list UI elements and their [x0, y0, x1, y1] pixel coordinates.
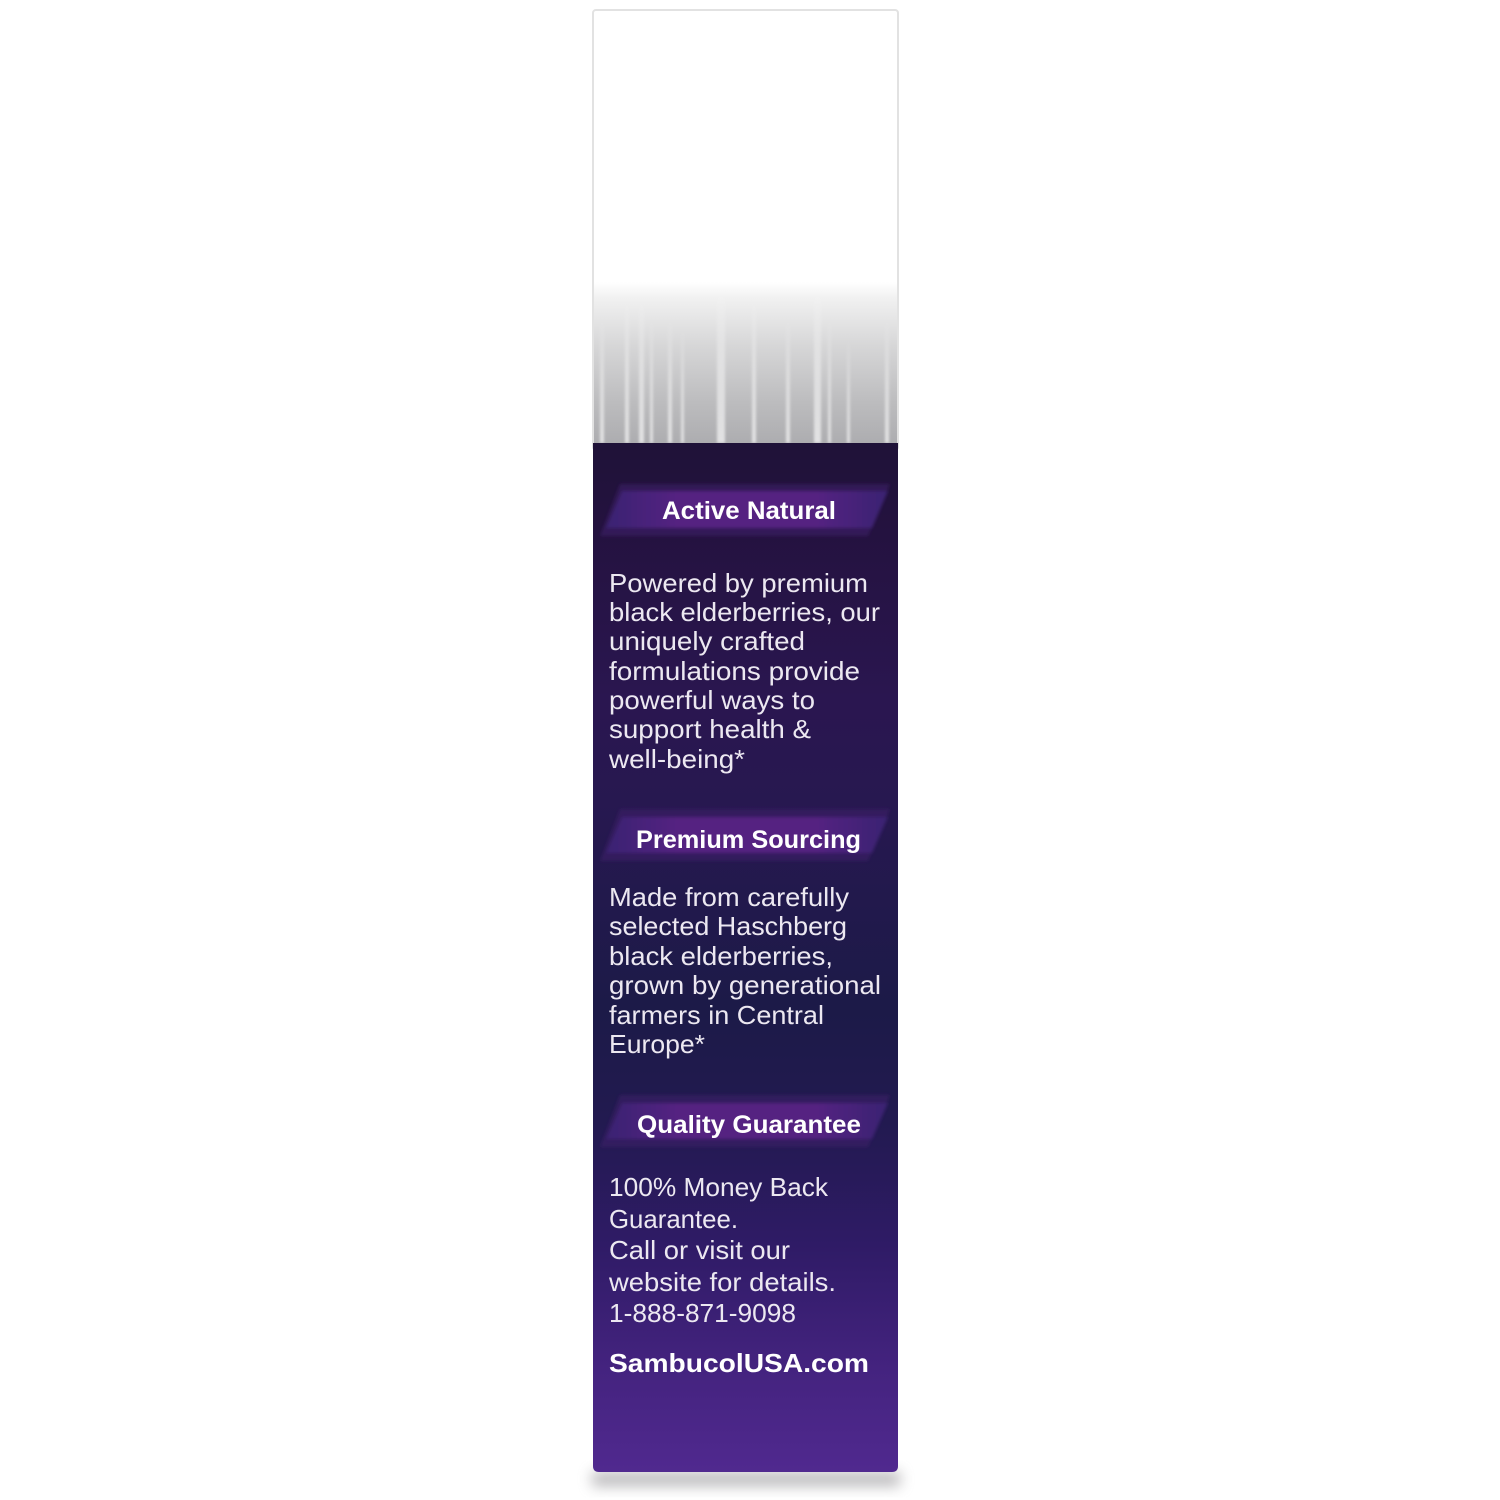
body text: selected Haschberg: [609, 911, 847, 941]
section: Active Natural: [600, 484, 890, 774]
body text: powerful ways to: [609, 685, 815, 715]
purple lower section of box: [593, 443, 898, 1472]
heading ribbon: [600, 809, 890, 861]
body text: grown by generational: [609, 970, 881, 1000]
body text: uniquely crafted: [609, 626, 805, 656]
white top section of box: [593, 10, 898, 450]
heading ribbon: [600, 1095, 890, 1147]
body text: [609, 882, 881, 1059]
body text: 1-888-871-9098: [609, 1298, 796, 1328]
body text: farmers in Central: [609, 1000, 824, 1030]
body text: black elderberries,: [609, 941, 833, 971]
body text: black elderberries, our: [609, 597, 880, 627]
box drop shadow: [592, 1472, 900, 1486]
body text: website for details.: [608, 1267, 836, 1297]
body text: [608, 568, 880, 774]
body text: Call or visit our: [609, 1235, 790, 1265]
body text: well-being*: [608, 744, 745, 774]
body text: Made from carefully: [609, 882, 849, 912]
section: Quality Guarantee: [600, 1095, 890, 1378]
heading: Premium Sourcing: [636, 826, 861, 854]
body text: formulations provide: [609, 656, 860, 686]
silver fade band: [594, 282, 897, 443]
section: Premium Sourcing: [600, 809, 890, 1059]
body text: support health &: [609, 714, 811, 744]
product box side panel: [593, 10, 898, 1472]
website address: SambucolUSA.com: [609, 1348, 869, 1378]
heading ribbon: [600, 484, 890, 536]
heading: Quality Guarantee: [637, 1111, 861, 1139]
body text: Guarantee.: [609, 1204, 738, 1234]
body text: Powered by premium: [609, 568, 868, 598]
body text: 100% Money Back: [609, 1172, 829, 1202]
heading: Active Natural: [662, 497, 836, 525]
body text: Europe*: [609, 1029, 705, 1059]
body text: [608, 1172, 836, 1328]
